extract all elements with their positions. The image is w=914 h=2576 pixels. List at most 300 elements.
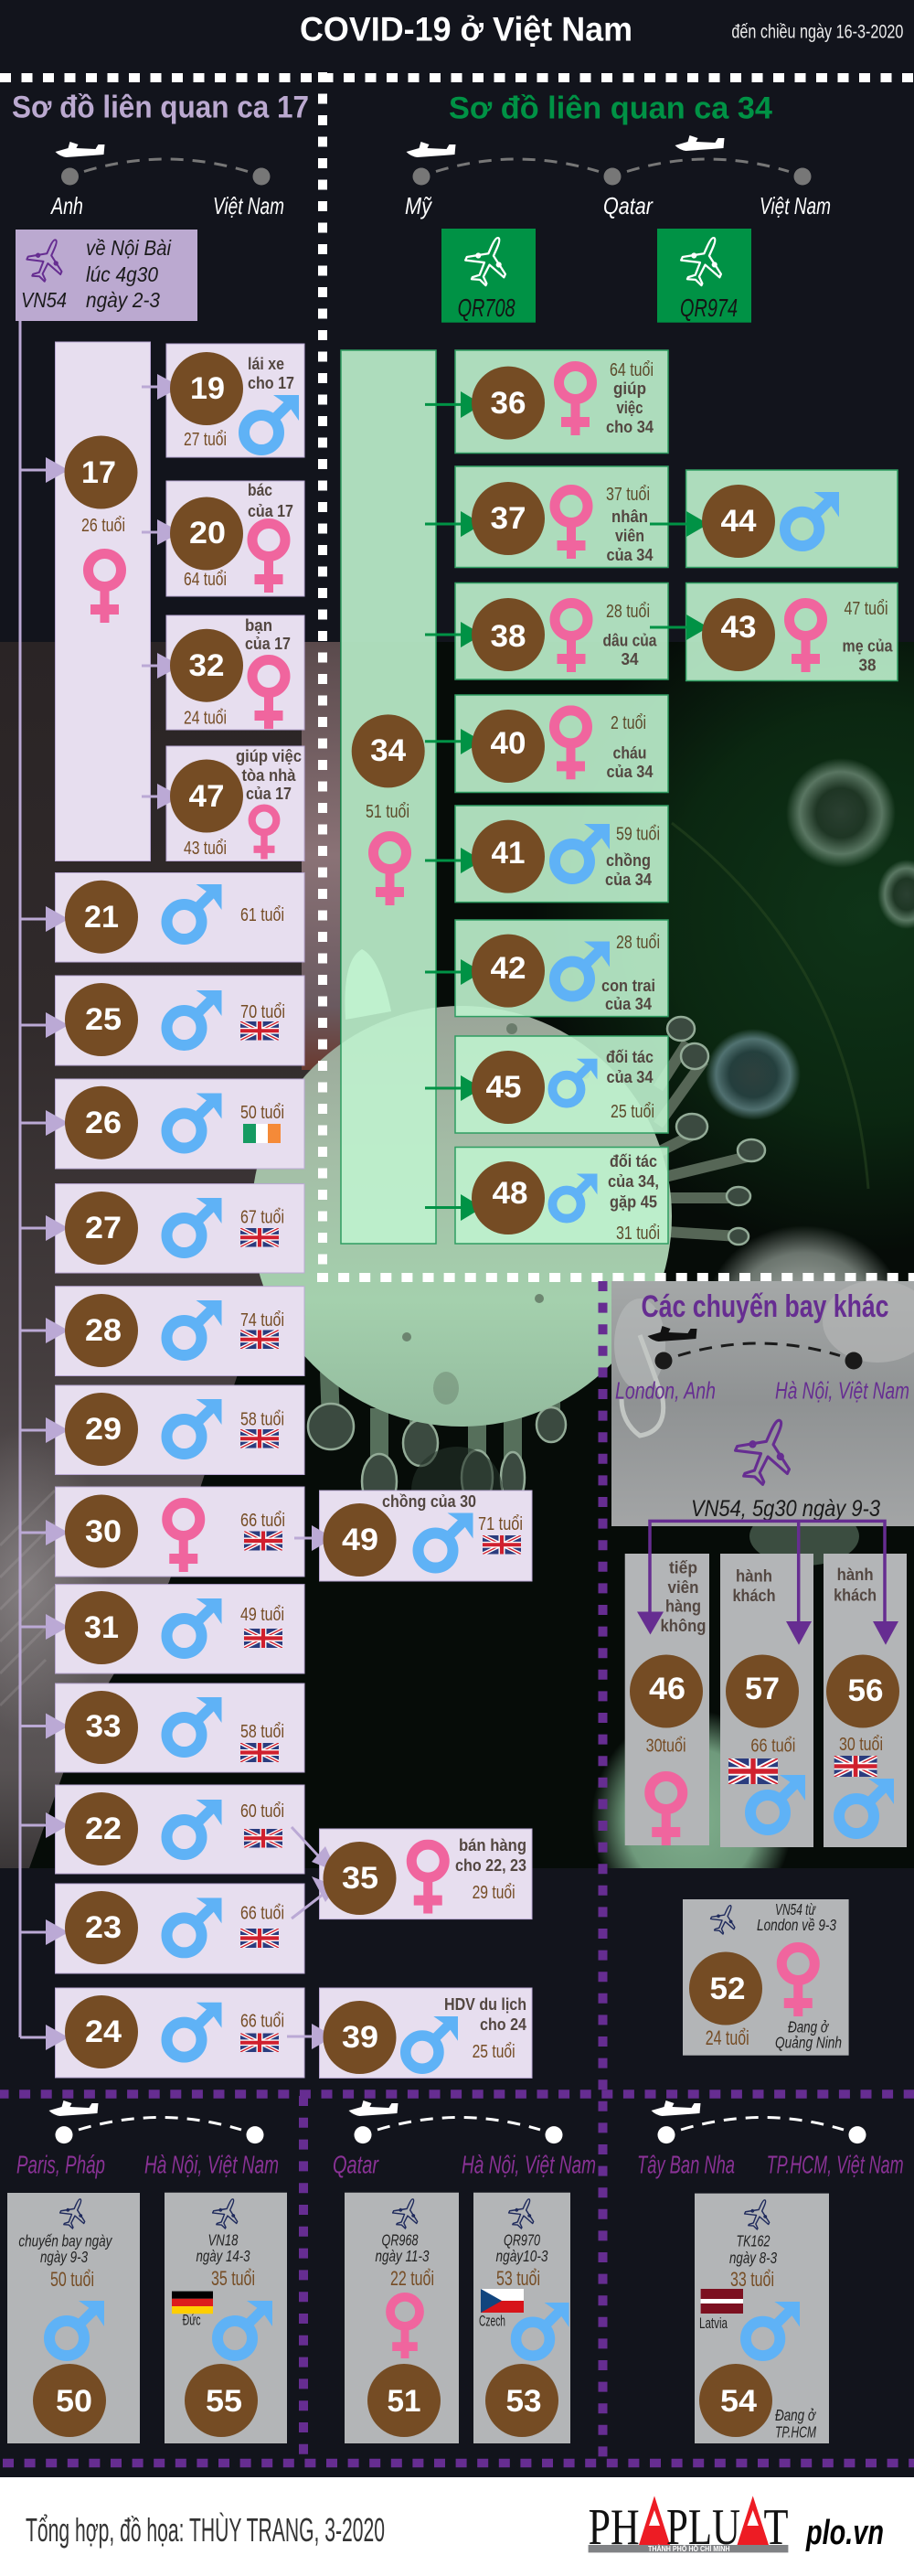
panel: case 49 [294, 1491, 532, 1581]
badge: case 57: 57 [745, 1672, 780, 1706]
description: khách [834, 1586, 877, 1604]
description: của 34 [607, 762, 654, 781]
icon: female [252, 808, 276, 860]
description: cho 17 [248, 373, 294, 392]
icon: female [559, 366, 592, 435]
connector arrows from flight VN54 [637, 1521, 898, 1645]
description [455, 1835, 526, 1875]
flight box: QR708 [441, 229, 536, 323]
icon: female [781, 1948, 814, 2016]
route: UK to Vietnam: Anh [49, 192, 83, 219]
icon: male [218, 2301, 272, 2356]
icon: female [650, 1776, 683, 1845]
panel: case 47 [142, 746, 304, 861]
badge: case 46: 46 [649, 1672, 686, 1706]
badge: case 29: 29 [85, 1412, 122, 1447]
badge: case 50: 50 [56, 2384, 92, 2419]
age: 64 tuổi [184, 569, 227, 590]
age: 66 tuổi [750, 1736, 795, 1757]
age: 35 tuổi [211, 2267, 255, 2290]
description: tiếp [669, 1558, 697, 1577]
badge: case 51 [367, 2364, 441, 2437]
icon: plane [741, 2195, 777, 2233]
age: 58 tuổi [240, 1408, 284, 1430]
badge: case 21: 21 [84, 900, 119, 935]
description: đối tác [606, 1047, 654, 1066]
badge: case 25: 25 [85, 1002, 122, 1037]
route: UK to Vietnam [49, 142, 284, 219]
panel: case 39 [287, 1988, 532, 2078]
description: nhân [611, 507, 648, 526]
arrow to case 28 [20, 1318, 69, 1343]
age: 24 tuổi [706, 2026, 749, 2049]
icon: male [166, 1198, 221, 1253]
arrow to case 48 [425, 1194, 483, 1221]
route: Paris to Hanoi: Hà Nội, Việt Nam [144, 2151, 279, 2179]
badge: case 23 [65, 1891, 138, 1964]
age: 25 tuổi [473, 2041, 515, 2062]
flag: Czech [481, 2289, 524, 2313]
route: Paris to Hanoi: Paris, Pháp [16, 2151, 105, 2179]
route: USA, Qatar, Vietnam: Mỹ [405, 192, 433, 219]
flight info: VN18 [208, 2231, 239, 2250]
badge: case 30: 30 [85, 1514, 122, 1549]
icon: purple plane VN54 [728, 1409, 806, 1491]
route: Spain to HCMC [637, 2100, 904, 2179]
website: plo.vn [805, 2514, 884, 2552]
flight info: chuyến bay ngày [18, 2232, 112, 2250]
badge: case 54 [699, 2364, 772, 2437]
badge: case 42: 42 [490, 951, 526, 986]
panel: case 41 [425, 806, 668, 903]
description: không [660, 1616, 706, 1635]
arrow to case 19 [142, 374, 181, 400]
badge: case 53: 53 [506, 2384, 541, 2419]
flight info: QR970 [504, 2231, 540, 2250]
flight box: VN54: ngày 2-3 [86, 288, 160, 312]
description [834, 1565, 877, 1604]
arrow to case 41 [425, 848, 483, 873]
route: Spain to HCMC: Tây Ban Nha [637, 2151, 735, 2179]
arrow to case 30 [20, 1520, 69, 1545]
panel: case 19 [142, 344, 304, 457]
arrow to case 29 [20, 1417, 69, 1443]
flight info: ngày 8-3 [729, 2249, 777, 2267]
age: 53 tuổi [496, 2267, 540, 2290]
badge: case 38 [472, 598, 545, 671]
description [606, 379, 654, 436]
icon: male [555, 942, 610, 997]
badge: case 35: 35 [342, 1861, 378, 1896]
flag: UK [240, 1330, 279, 1349]
icon: male [552, 1174, 598, 1219]
icon: male [166, 1300, 221, 1355]
icon: male [166, 884, 221, 939]
badge: case 25 [65, 983, 138, 1056]
badge: case 56: 56 [848, 1673, 883, 1708]
flight info: ngày 9-3 [40, 2248, 88, 2266]
flag: UK [240, 1429, 279, 1448]
description [601, 976, 655, 1013]
badge: case 48: 48 [492, 1176, 528, 1211]
badge: case 42 [472, 935, 545, 1008]
badge: case 21 [65, 881, 138, 954]
age: 50 tuổi [240, 1102, 284, 1123]
flag: UK [244, 1629, 282, 1648]
badge: case 46 [630, 1655, 703, 1728]
age: 22 tuổi [390, 2267, 434, 2290]
badge: case 27: 27 [85, 1211, 122, 1245]
arrow to case 33 [20, 1714, 69, 1739]
description [607, 507, 654, 564]
panel: case 57 [720, 1554, 813, 1847]
badge: case 22: 22 [85, 1812, 122, 1846]
icon: female [390, 2297, 420, 2358]
badge: case 40: 40 [490, 726, 526, 761]
badge: case 48 [472, 1161, 545, 1235]
age: 29 tuổi [473, 1882, 515, 1903]
description: của 34 [605, 870, 653, 889]
description [603, 631, 657, 668]
description [245, 615, 291, 653]
flight box: VN54 [16, 230, 197, 321]
location: Quảng Ninh [775, 2034, 842, 2052]
heading: case 34 diagram: Sơ đồ liên quan ca 34 [449, 91, 772, 126]
route: UK to Vietnam: Việt Nam [213, 192, 284, 219]
badge: case 41 [472, 820, 545, 893]
location [775, 2017, 842, 2052]
badge: case 27 [65, 1192, 138, 1265]
flight info: ngày 14-3 [196, 2247, 250, 2265]
location: Đang ở [775, 2406, 816, 2424]
badge: case 36 [472, 367, 545, 440]
route: USA, Qatar, Vietnam: Qatar [603, 192, 654, 219]
badge: case 47 [170, 759, 243, 832]
route: Paris to Hanoi [16, 2100, 279, 2179]
panel: case 54 [695, 2194, 829, 2443]
badge: case 54: 54 [720, 2384, 757, 2419]
logo: Pháp Luật: T [764, 2499, 788, 2556]
flag: UK [240, 1021, 279, 1041]
badge: case 50 [33, 2364, 106, 2437]
location [775, 2406, 816, 2442]
panel: case 22 [20, 1785, 304, 1874]
icon: male [166, 1800, 221, 1855]
badge: case 53 [485, 2364, 558, 2437]
white dashed dividers [0, 72, 914, 1277]
description [733, 1566, 775, 1605]
arrow to case 26 [20, 1110, 69, 1136]
age: 70 tuổi [240, 1001, 285, 1022]
badge: case 20: 20 [189, 516, 226, 550]
arrow to case 38 [425, 622, 483, 647]
location: TP.HCM [775, 2423, 816, 2442]
description: hành [837, 1565, 874, 1584]
arrow to case 32 [142, 653, 181, 679]
badge: case 17 [64, 435, 137, 508]
country: Czech [479, 2312, 505, 2330]
panel: case 36 [425, 350, 668, 454]
age: 64 tuổi [610, 359, 654, 380]
age: 27 tuổi [184, 429, 227, 450]
age: 26 tuổi [81, 515, 125, 536]
icon: male [166, 1697, 221, 1752]
icon: female [88, 554, 121, 623]
flight info [196, 2231, 250, 2265]
age: 66 tuổi [240, 2011, 284, 2032]
age: 51 tuổi [366, 801, 409, 822]
arrow to case 22 [20, 1812, 69, 1838]
panel: case 20 [142, 480, 304, 596]
logo: Pháp Luật: THÀNH PHỐ HỒ CHÍ MINH [648, 2544, 730, 2553]
panel: case 55 [165, 2193, 287, 2443]
arrow to case 31 [20, 1614, 69, 1640]
icon: plane [209, 2194, 245, 2232]
description: giúp [613, 379, 646, 398]
age: 59 tuổi [616, 824, 660, 845]
description: của 17 [248, 501, 293, 520]
badge: case 43: 43 [720, 610, 757, 645]
badge: case 49: 49 [342, 1523, 378, 1557]
arrow to case 45 [425, 1075, 483, 1101]
arrow to case 20 [142, 519, 181, 545]
description: của 17 [245, 634, 291, 653]
badge: case 19: 19 [190, 371, 225, 406]
panel: case 21 [20, 872, 304, 962]
description: bán hàng [459, 1835, 526, 1855]
age: 37 tuổi [606, 484, 650, 505]
panel: case 44 [650, 470, 898, 567]
description: việc [616, 398, 643, 417]
badge: case 31 [65, 1591, 138, 1664]
age: 25 tuổi [611, 1101, 654, 1122]
flight info: TK162 [737, 2232, 771, 2250]
description: viên [615, 526, 644, 545]
badge: case 23: 23 [85, 1910, 122, 1945]
arrow to case 42 [425, 959, 483, 985]
flag: Latvia [701, 2289, 743, 2314]
country: Latvia [699, 2314, 728, 2332]
icon: male [166, 990, 221, 1045]
arrow to case 40 [425, 729, 483, 754]
description: hàng [665, 1597, 701, 1615]
panel: case 26 [20, 1079, 304, 1169]
arrow to case 24 [20, 2025, 69, 2050]
route: Qatar to Hanoi: Hà Nội, Việt Nam [462, 2151, 596, 2179]
icon: female [554, 711, 587, 779]
description: bác [248, 480, 272, 499]
panel: case 30 [20, 1487, 304, 1577]
flag: UK [834, 1756, 877, 1777]
panel: case 29 [20, 1385, 304, 1474]
panel: case 28 [20, 1287, 304, 1375]
arrow to case 27 [20, 1215, 69, 1241]
icon: female [373, 836, 406, 905]
logo: Pháp Luật: PLU [666, 2499, 740, 2556]
badge: case 33: 33 [86, 1709, 121, 1744]
panel: case 24 [20, 1988, 304, 2078]
badge: case 55: 55 [206, 2384, 242, 2419]
flag: UK [483, 1535, 521, 1555]
badge: case 33 [65, 1691, 138, 1764]
flag: UK [244, 1531, 282, 1551]
description: cháu [612, 743, 647, 763]
panel: case 48 [425, 1147, 668, 1244]
badge: case 41: 41 [492, 836, 525, 871]
description: của 34 [605, 994, 653, 1013]
badge: case 24: 24 [85, 2015, 122, 2049]
description: 34 [622, 649, 639, 668]
age: 31 tuổi [616, 1223, 660, 1244]
icon: plane [389, 2194, 425, 2232]
route: Qatar to Hanoi: Qatar [333, 2151, 379, 2179]
description: của 34 [607, 545, 654, 564]
badge: case 55 [185, 2364, 258, 2437]
route: Qatar to Hanoi [333, 2100, 596, 2179]
arrow to case 44 [650, 511, 708, 537]
badge: case 37: 37 [490, 501, 526, 536]
age: 28 tuổi [606, 601, 650, 622]
panel: case 56 [824, 1554, 907, 1847]
description [660, 1558, 706, 1635]
route: USA, Qatar, Vietnam: Việt Nam [760, 192, 831, 219]
flight info: ngày10-3 [495, 2247, 548, 2265]
icon: female [555, 604, 588, 672]
description: chồng của 30 [382, 1491, 476, 1511]
panel: case 53 [473, 2193, 570, 2443]
age: 66 tuổi [240, 1510, 285, 1531]
arrow to case 17 [20, 457, 69, 483]
badge: case 29 [65, 1393, 138, 1466]
panel: case 40 [425, 695, 668, 792]
description: bạn [245, 615, 272, 635]
description: tòa nhà [241, 765, 296, 785]
flight info [729, 2232, 777, 2267]
description: khách [733, 1586, 775, 1605]
icon: male [166, 1399, 221, 1454]
badge: case 32: 32 [188, 648, 225, 683]
route: London to Hanoi: London, Anh [615, 1377, 716, 1405]
panel: case 34 [341, 350, 436, 1244]
flag: UK [240, 2034, 279, 2052]
badge: case 44 [702, 485, 775, 558]
trunk line from VN54 [18, 321, 22, 2037]
description: hành [736, 1566, 772, 1586]
icon: male [419, 1512, 473, 1567]
purple dashed dividers [0, 1281, 914, 2464]
icon: male [166, 1598, 221, 1653]
flight info: VN54 từ [775, 1900, 816, 1919]
arrow to case 49 [294, 1525, 334, 1551]
panel: case 35 [292, 1827, 532, 1919]
description: đối tác [610, 1151, 657, 1170]
icon: male [244, 395, 299, 450]
flag: UK [240, 1743, 279, 1762]
icon: female [411, 1844, 444, 1914]
badge: case 45 [472, 1051, 545, 1124]
heading: case 17 diagram: Sơ đồ liên quan ca 17 [12, 91, 309, 125]
icon: female [167, 1503, 200, 1572]
flight info [757, 1900, 836, 1934]
description [843, 636, 893, 675]
description [248, 480, 293, 520]
title: COVID-19 ở Việt Nam [300, 11, 632, 48]
badge: case 20 [170, 497, 243, 571]
flight info [495, 2231, 548, 2265]
age: 66 tuổi [240, 1903, 284, 1924]
age: 49 tuổi [240, 1604, 284, 1625]
flight info [375, 2231, 430, 2265]
panel: case 50 [7, 2193, 140, 2443]
description: dâu của [603, 631, 657, 650]
flight info: QR968 [382, 2231, 419, 2250]
panel: case 37 [425, 466, 668, 567]
panel: case 51 [345, 2193, 459, 2443]
icon: male [166, 1094, 221, 1149]
icon: male [516, 2303, 569, 2356]
panel: case 43 [650, 583, 898, 680]
badge: case 26: 26 [85, 1106, 122, 1140]
age: 28 tuổi [616, 932, 660, 953]
arrows from cases 22 and 23 [292, 1827, 337, 1919]
arrow to case 37 [425, 511, 483, 537]
icon: male [166, 1897, 221, 1952]
panel: case 42 [425, 920, 668, 1017]
badge: case 52: 52 [709, 1972, 746, 2006]
panel: case 25 [20, 976, 304, 1065]
badge: case 51: 51 [388, 2384, 420, 2419]
flag: UK [240, 1228, 279, 1247]
badge: case 22 [65, 1792, 138, 1865]
age: 47 tuổi [845, 598, 888, 619]
panel: case 32 [142, 615, 304, 730]
footer credit: Tổng hợp, đồ họa: THÙY TRANG, 3-2020 [26, 2511, 385, 2549]
flight box: VN54: VN54 [21, 288, 67, 312]
logo: Pháp Luật: PH [589, 2499, 640, 2556]
age: 58 tuổi [240, 1721, 284, 1742]
flight box: VN54: lúc 4g30 [86, 262, 158, 286]
panel: case 31 [20, 1585, 304, 1673]
badge: case 45: 45 [486, 1070, 521, 1105]
arrow to case 21 [20, 906, 69, 932]
description: của 34, [608, 1171, 659, 1191]
badge: case 28: 28 [85, 1313, 122, 1348]
description: của 34 [607, 1067, 654, 1086]
flight info [18, 2232, 112, 2266]
description [607, 743, 654, 781]
age: 33 tuổi [730, 2268, 774, 2291]
panel: case 27 [20, 1184, 304, 1273]
description [236, 746, 302, 803]
age: 2 tuổi [611, 712, 646, 733]
age: 30tuổi [646, 1736, 686, 1757]
icon: male [49, 2301, 104, 2356]
badge: case 31: 31 [84, 1610, 119, 1645]
route: USA, Qatar, Vietnam [405, 135, 831, 219]
flag: Germany [172, 2292, 213, 2314]
description: chồng [606, 850, 651, 870]
icon: male [839, 1779, 894, 1833]
badge: case 40 [472, 710, 545, 783]
badge: case 28 [65, 1294, 138, 1367]
badge: case 37 [472, 482, 545, 555]
panel: case 17 [20, 342, 150, 861]
icon: female [555, 490, 588, 559]
badge: case 57 [726, 1655, 799, 1728]
age: 30 tuổi [839, 1734, 883, 1755]
flight box: QR974: QR974 [680, 294, 738, 322]
flight box: QR708: QR708 [458, 294, 515, 322]
